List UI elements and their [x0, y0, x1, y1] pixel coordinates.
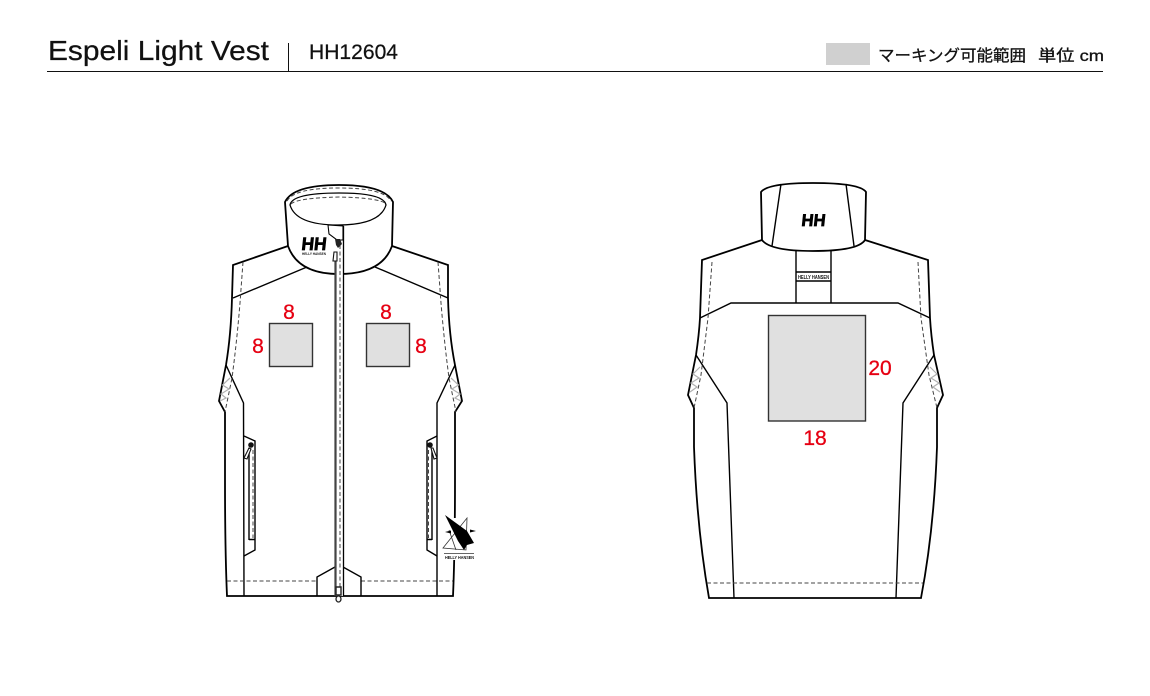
yoke seams	[233, 267, 448, 298]
marking area: front right	[366, 301, 427, 366]
right pocket	[427, 436, 437, 556]
marking area: back: 18	[803, 427, 827, 450]
back body outline	[688, 240, 943, 598]
legend swatch	[826, 43, 870, 65]
marking area: front right: 8	[380, 301, 392, 324]
sail logo: HELLY HANSEN	[445, 555, 474, 560]
hem stitching	[707, 582, 923, 584]
back vest drawing	[688, 183, 943, 598]
hem stitching	[227, 580, 453, 582]
left pocket	[244, 436, 255, 556]
collar	[285, 185, 393, 274]
marking area: back: 20	[868, 357, 892, 380]
hanger loop with label: HELLY HANSEN	[798, 275, 829, 281]
yoke seam	[700, 303, 930, 318]
header	[47, 35, 1104, 72]
HH logo on collar: HH	[301, 234, 328, 254]
title: Espeli Light Vest	[48, 35, 269, 66]
hanger loop with label	[796, 250, 831, 303]
marking area: back	[768, 316, 892, 450]
bottom placket	[317, 567, 361, 596]
center zipper	[328, 225, 344, 602]
front body outline	[219, 246, 462, 596]
model number: HH12604	[309, 41, 398, 64]
stitching	[694, 262, 937, 408]
marking area: front right: 8	[415, 335, 427, 358]
underarm zigzag	[220, 378, 461, 401]
HH logo on collar: HELLY HANSEN	[302, 252, 326, 256]
unit text: 単位 cm	[1038, 47, 1104, 65]
sail logo	[441, 515, 477, 560]
armhole seams	[226, 365, 455, 596]
legend text: マーキング可能範囲	[878, 47, 1026, 65]
marking area: front left	[252, 301, 312, 366]
underarm zigzag	[690, 367, 940, 392]
stitching	[225, 262, 456, 412]
back collar	[761, 183, 866, 251]
HH logo on back collar: HH	[801, 211, 827, 230]
marking area: front left: 8	[252, 335, 264, 358]
armhole seams	[696, 355, 934, 598]
marking area: front left: 8	[283, 301, 295, 324]
front vest drawing	[219, 185, 477, 602]
